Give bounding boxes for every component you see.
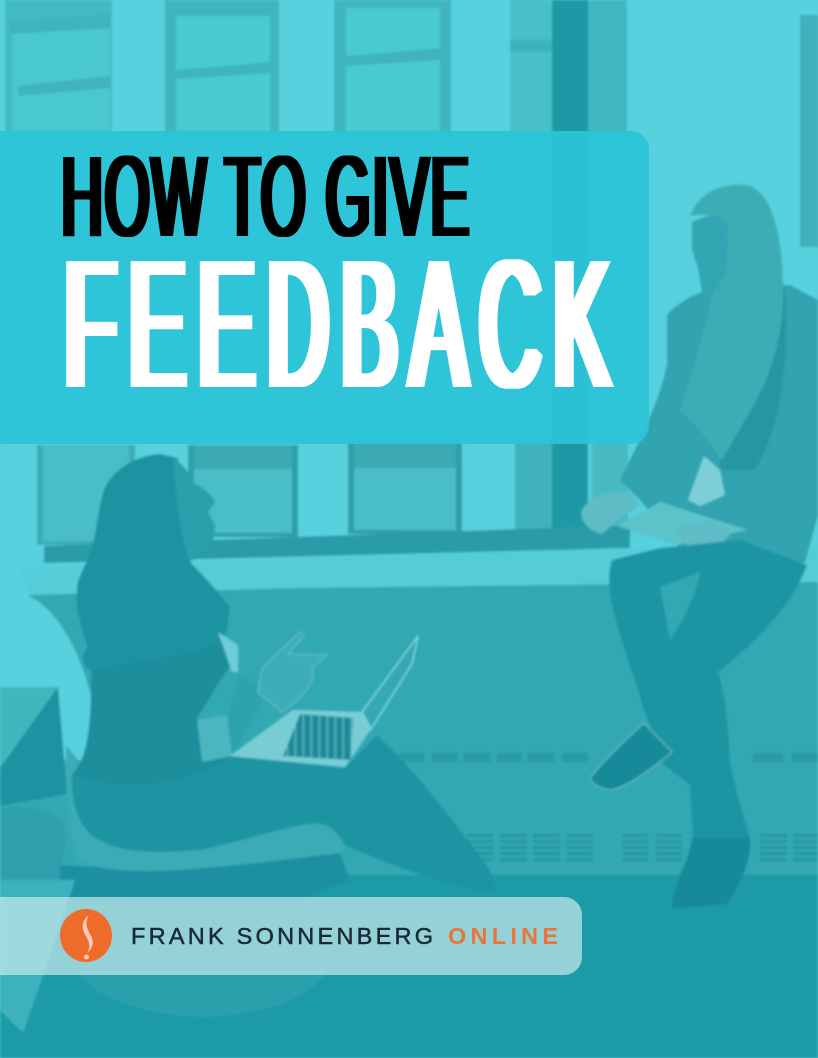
light strip at lower left: [0, 880, 75, 1033]
hair: [77, 454, 230, 670]
trousers: [609, 540, 807, 840]
bar background: [0, 897, 582, 975]
side table: [0, 687, 67, 806]
heading: how to give: HOW TO GIVE: [61, 134, 471, 261]
chair seat: [66, 745, 346, 871]
inner top: [712, 290, 786, 470]
title panel: [0, 131, 649, 444]
window sill band: [44, 525, 630, 563]
trousers: [72, 735, 498, 895]
brand suffix: ONLINE: [448, 923, 558, 949]
sill ledge: [20, 545, 818, 595]
radiator vents: [398, 753, 818, 862]
logo bar: [0, 897, 582, 975]
panel background: [0, 131, 649, 444]
lower wall: [0, 582, 818, 880]
jacket: [74, 600, 232, 785]
under seat shadow: [60, 853, 350, 900]
bag on floor: [0, 807, 65, 885]
laptop base: [230, 710, 371, 767]
jacket: [620, 285, 818, 563]
hands: [258, 632, 328, 712]
front shoe: [672, 838, 750, 909]
armchair back: [0, 591, 92, 760]
blouse: [688, 456, 725, 506]
person: woman seated on left: [66, 454, 498, 895]
floor: [0, 875, 818, 1058]
person: woman seated on right: [581, 185, 818, 909]
back shoe: [590, 723, 672, 790]
face: [692, 216, 728, 296]
upper windows: [5, 0, 818, 247]
hair: [680, 185, 783, 460]
window mullion: [552, 0, 588, 550]
forearm: [227, 676, 266, 756]
left hand: [581, 491, 640, 534]
lower windows: [37, 440, 628, 545]
side table top: [0, 687, 58, 768]
icon: orange logo circle: [60, 909, 112, 962]
laptop: [230, 636, 418, 767]
blouse: [218, 632, 238, 672]
tablet: [617, 502, 748, 545]
keyboard: [283, 714, 353, 760]
laptop screen: [362, 636, 418, 729]
heading: feedback: FEEDBACK: [65, 223, 623, 427]
stool base: [77, 970, 327, 1017]
brand name: FRANK SONNENBERG: [131, 923, 433, 949]
gap between legs: [660, 572, 700, 640]
face: [173, 458, 215, 562]
sleeve cuff: [197, 715, 232, 762]
right hand: [678, 520, 730, 553]
